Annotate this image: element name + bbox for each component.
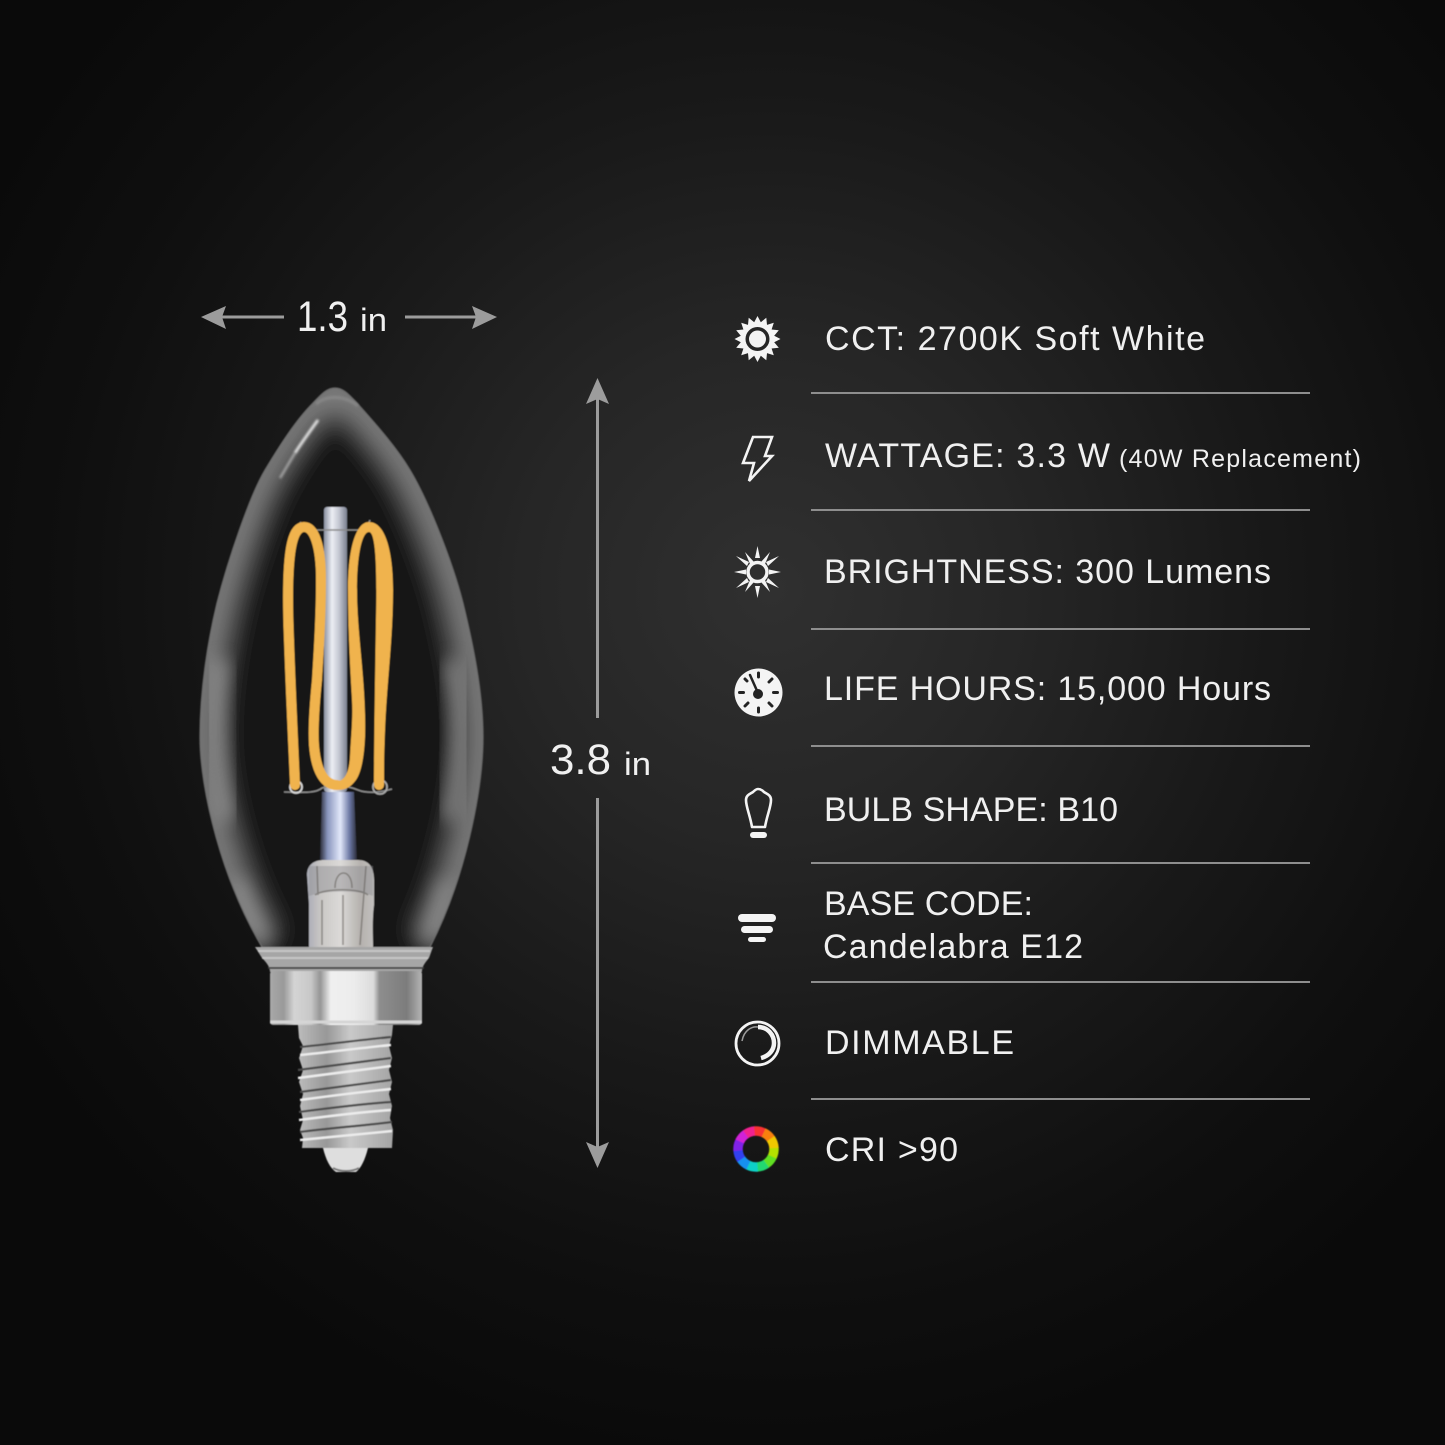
text: dimmable: DIMMABLE (825, 1024, 1014, 1062)
icon: sun rays (734, 546, 781, 598)
icon: dial clock (734, 668, 782, 716)
text: CRI: CRI >90 (825, 1131, 958, 1169)
text: life hours: LIFE HOURS: 15,000 Hours (824, 670, 1271, 708)
filament (288, 522, 393, 794)
text: bulb shape: BULB SHAPE: B10 (824, 791, 1118, 829)
arrow: height up (586, 378, 609, 718)
arrow: width left (201, 306, 284, 329)
row: CCT (734, 316, 1205, 362)
text: base code: BASE CODE: (824, 885, 1033, 923)
row: base code (738, 885, 1083, 966)
text: 40W replacement: (40W Replacement) (1119, 445, 1361, 473)
arrow: width right (405, 306, 497, 329)
label: in (height): in (624, 746, 651, 782)
icon: dimmer ring (736, 1022, 779, 1065)
label: in: in (360, 302, 387, 338)
icon: bulb outline (746, 789, 771, 835)
row: dimmable (736, 1022, 1014, 1065)
icon: base stripes (738, 914, 776, 942)
text: wattage: WATTAGE: 3.3 W (825, 437, 1110, 475)
row: brightness (734, 546, 1271, 598)
icon: colour wheel (731, 1124, 781, 1174)
text: brightness: BRIGHTNESS: 300 Lumens (824, 553, 1271, 591)
label: 1.3: 1.3 (297, 293, 348, 341)
row: wattage (743, 437, 1361, 481)
icon: lightning bolt (743, 437, 772, 481)
row: bulb shape (746, 789, 1118, 835)
divider lines (811, 392, 1310, 1100)
glass pinch (307, 860, 374, 947)
contact tip (323, 1148, 368, 1172)
glass envelope (200, 388, 483, 947)
text: CCT: CCT: 2700K Soft White (825, 320, 1205, 358)
support stem (284, 507, 392, 860)
height dimension (550, 378, 651, 1168)
arrow: height down (586, 798, 609, 1168)
label: 3.8: 3.8 (550, 736, 611, 784)
row: life hours (734, 668, 1271, 716)
text: candelabra: Candelabra E12 (823, 928, 1083, 966)
icon: gear sun (734, 316, 780, 362)
metal collar and base (255, 947, 433, 1025)
bulb illustration (200, 388, 483, 1172)
width dimension (201, 293, 497, 341)
row: CRI (731, 1124, 958, 1174)
screw thread (298, 1025, 393, 1148)
spec list (731, 316, 1361, 1174)
